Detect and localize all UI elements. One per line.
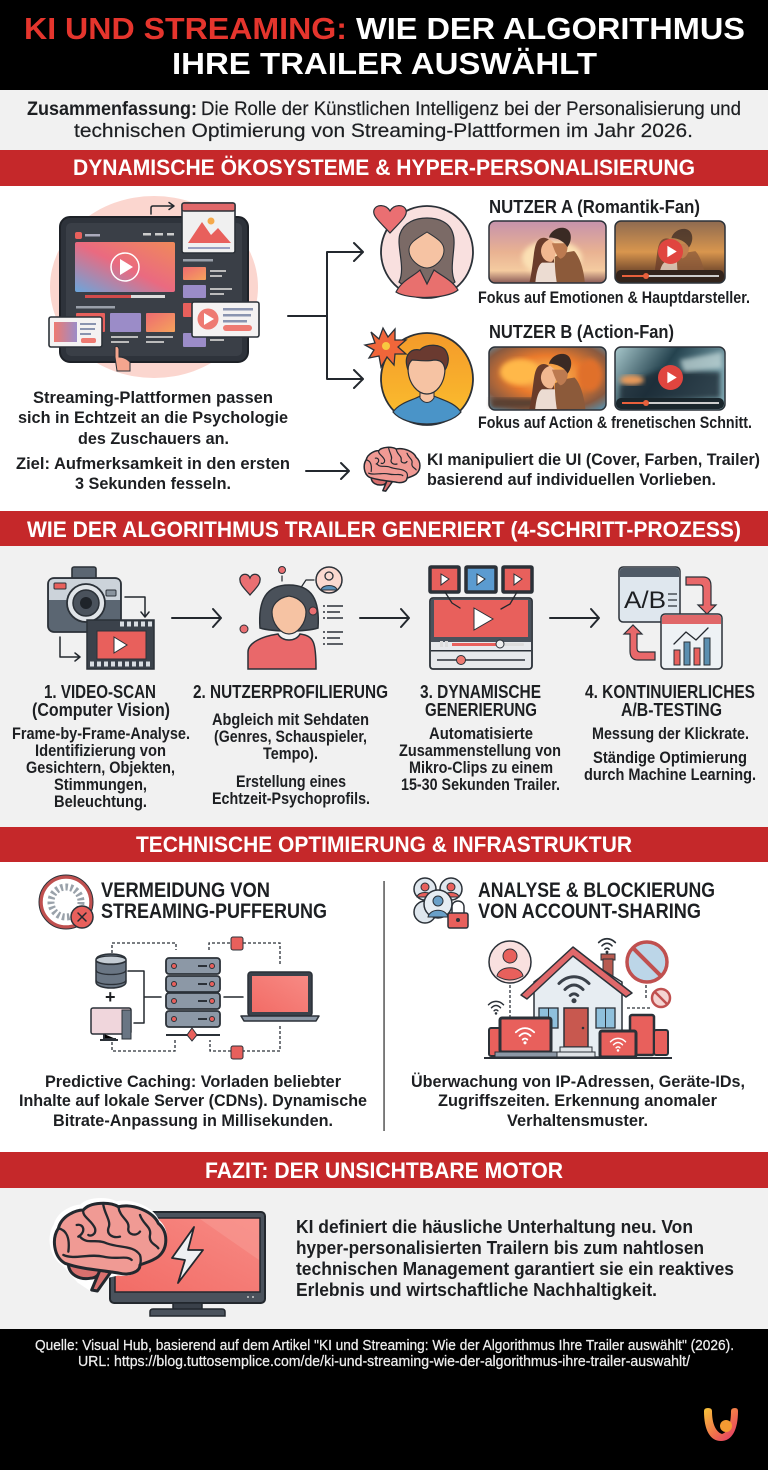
section heading: technical optimisation: TECHNISCHE OPTIMIERUNG & INFRASTRUKTUR	[136, 832, 632, 857]
arrow: step 3 to 4	[550, 609, 599, 627]
text block: platforms adapt: des Zuschauers an.	[78, 430, 229, 448]
source footer: URL: https://blog.tuttosemplice.com/de/ki-und-streaming-wie-der-algorithmus-ihre-trailer-auswahlt/	[78, 1353, 691, 1370]
icon: buffering spinner	[39, 875, 93, 929]
conclusion text	[296, 1216, 734, 1300]
conclusion text: technischen Management garantiert sie ein reaktives	[296, 1258, 734, 1279]
text block: platforms adapt: sich in Echtzeit an die Psychologie	[18, 409, 288, 427]
step 1 text: Stimmungen,	[54, 776, 147, 794]
diagram: CDN caching	[91, 937, 319, 1059]
step 1 text: Beleuchtung.	[54, 793, 147, 811]
panel: personalisation	[16, 196, 760, 493]
thumbnail: romance close-up	[489, 221, 606, 283]
summary text: technischen Optimierung von Streaming-Plattformen im Jahr 2026.	[74, 120, 693, 142]
icon: user B avatar	[365, 328, 473, 425]
step 2 text: (Genres, Schauspieler,	[214, 728, 367, 746]
title: IHRE TRAILER AUSWÄHLT	[172, 46, 597, 81]
text block: monitoring: Überwachung von IP-Adressen, Geräte-IDs,	[411, 1072, 745, 1091]
step 2 text: Abgleich mit Sehdaten	[212, 711, 369, 729]
step 3 text: Zusammenstellung von	[399, 742, 561, 760]
summary text: Zusammenfassung:	[27, 98, 197, 120]
text block: goal	[16, 455, 290, 493]
icon: camera and film	[48, 567, 154, 669]
section heading: technical optimisation	[0, 827, 768, 862]
conclusion text: KI definiert die häusliche Unterhaltung neu. Von	[296, 1216, 693, 1237]
section heading: 4-step process	[0, 511, 768, 546]
text block: goal: 3 Sekunden fesseln.	[75, 475, 231, 493]
arrow: branch to users	[288, 243, 363, 388]
text block: AI manipulates UI	[427, 451, 760, 489]
step 4 text: Ständige Optimierung	[593, 749, 747, 767]
text block: predictive caching: Bitrate-Anpassung in Millisekunden.	[53, 1112, 333, 1130]
thumbnail: romance trailer frame	[615, 221, 725, 283]
step 1 text: Frame-by-Frame-Analyse.	[12, 725, 190, 743]
section heading: 4-step process: WIE DER ALGORITHMUS TRAILER GENERIERT (4-SCHRITT-PROZESS)	[27, 517, 741, 542]
arrow: step 2 to 3	[360, 609, 409, 627]
step 1 text: Identifizierung von	[35, 742, 166, 760]
step 1 text: 1. VIDEO-SCAN	[44, 682, 156, 702]
user B heading: NUTZER B (Action-Fan)	[489, 322, 674, 342]
step 2 text: Echtzeit-Psychoprofils.	[212, 790, 370, 808]
text block: monitoring: Verhaltensmuster.	[507, 1112, 648, 1130]
section heading: conclusion	[0, 1152, 768, 1188]
icon: logo	[704, 1408, 738, 1441]
step 3 text: Automatisierte	[429, 725, 533, 743]
step 4 text	[584, 682, 756, 784]
step 3 text: Mikro-Clips zu einem	[409, 759, 553, 777]
section heading: dynamische Ökosysteme: DYNAMISCHE ÖKOSYSTEME & HYPER-PERSONALISIERUNG	[73, 155, 695, 180]
panel: account sharing	[411, 878, 745, 1130]
text block: monitoring	[411, 1072, 745, 1130]
step 2 text: Erstellung eines	[236, 773, 346, 791]
step 2 text	[193, 682, 388, 808]
icon: A/B testing windows: A/B	[624, 587, 666, 614]
source footer	[35, 1337, 734, 1370]
text block: predictive caching: Inhalte auf lokale Server (CDNs). Dynamische	[19, 1092, 367, 1110]
icon: user A avatar	[374, 206, 473, 298]
step 2 text: Tempo).	[263, 745, 318, 763]
thumbnail: action car frame	[615, 347, 725, 410]
icon: user profiling	[240, 566, 343, 669]
heading: account sharing	[478, 879, 715, 923]
step 3 text: 3. DYNAMISCHE	[420, 682, 541, 702]
summary text	[27, 98, 741, 142]
text block: platforms adapt: Streaming-Plattformen passen	[33, 389, 273, 407]
text block: platforms adapt	[18, 389, 288, 448]
heading: buffering	[101, 879, 327, 923]
icon: account sharing group	[414, 878, 468, 928]
heading: account sharing: ANALYSE & BLOCKIERUNG	[478, 879, 715, 902]
icon: brain and monitor	[53, 1202, 265, 1316]
diagram: CDN caching: +	[105, 987, 116, 1007]
text block: AI manipulates UI: KI manipuliert die UI (Cover, Farben, Trailer)	[427, 451, 760, 469]
user A heading: NUTZER A (Romantik-Fan)	[489, 197, 700, 217]
illustration: connected house	[484, 939, 672, 1058]
arrow: goal to AI	[306, 463, 349, 479]
title	[24, 11, 745, 81]
step 2 text: 2. NUTZERPROFILIERUNG	[193, 682, 388, 702]
step 3 text: 15-30 Sekunden Trailer.	[401, 776, 560, 794]
icon: brain	[364, 447, 420, 491]
panel: four steps	[12, 566, 756, 811]
panel: buffering	[19, 875, 367, 1130]
step 3 text	[399, 682, 561, 794]
heading: buffering: STREAMING-PUFFERUNG	[101, 900, 327, 923]
conclusion text: Erlebnis und wirtschaftliche Nachhaltigkeit.	[296, 1279, 657, 1300]
arrow: step 1 to 2	[172, 609, 221, 627]
step 4 text: A/B-TESTING	[621, 700, 722, 720]
step 4 text: Messung der Klickrate.	[592, 725, 749, 743]
title: WIE DER ALGORITHMUS	[356, 11, 745, 46]
section heading: conclusion: FAZIT: DER UNSICHTBARE MOTOR	[205, 1158, 563, 1183]
summary text: Die Rolle der Künstlichen Intelligenz bei der Personalisierung und	[201, 98, 741, 120]
step 1 text	[12, 682, 190, 811]
heading: buffering: VERMEIDUNG VON	[101, 879, 270, 902]
text block: predictive caching	[19, 1073, 367, 1130]
step 3 text: GENERIERUNG	[425, 700, 537, 720]
heading: account sharing: VON ACCOUNT-SHARING	[478, 900, 701, 923]
icon: A/B testing windows	[619, 567, 722, 669]
conclusion text: hyper-personalisierten Trailern bis zum nahtlosen	[296, 1237, 704, 1258]
step 1 text: Gesichtern, Objekten,	[26, 759, 175, 777]
step 1 text: (Computer Vision)	[32, 700, 170, 720]
icon: streaming tablet interface	[49, 196, 259, 378]
section heading: dynamische Ökosysteme	[0, 150, 768, 186]
text block: monitoring: Zugriffszeiten. Erkennung anomaler	[438, 1092, 718, 1110]
icon: dynamic generation player	[430, 567, 532, 669]
thumbnail: action explosion	[489, 347, 606, 410]
text block: goal: Ziel: Aufmerksamkeit in den ersten	[16, 455, 290, 473]
text block: predictive caching: Predictive Caching: Vorladen beliebter	[45, 1073, 342, 1091]
text block: AI manipulates UI: basierend auf individuellen Vorlieben.	[427, 471, 716, 489]
title: KI UND STREAMING:	[24, 11, 347, 46]
